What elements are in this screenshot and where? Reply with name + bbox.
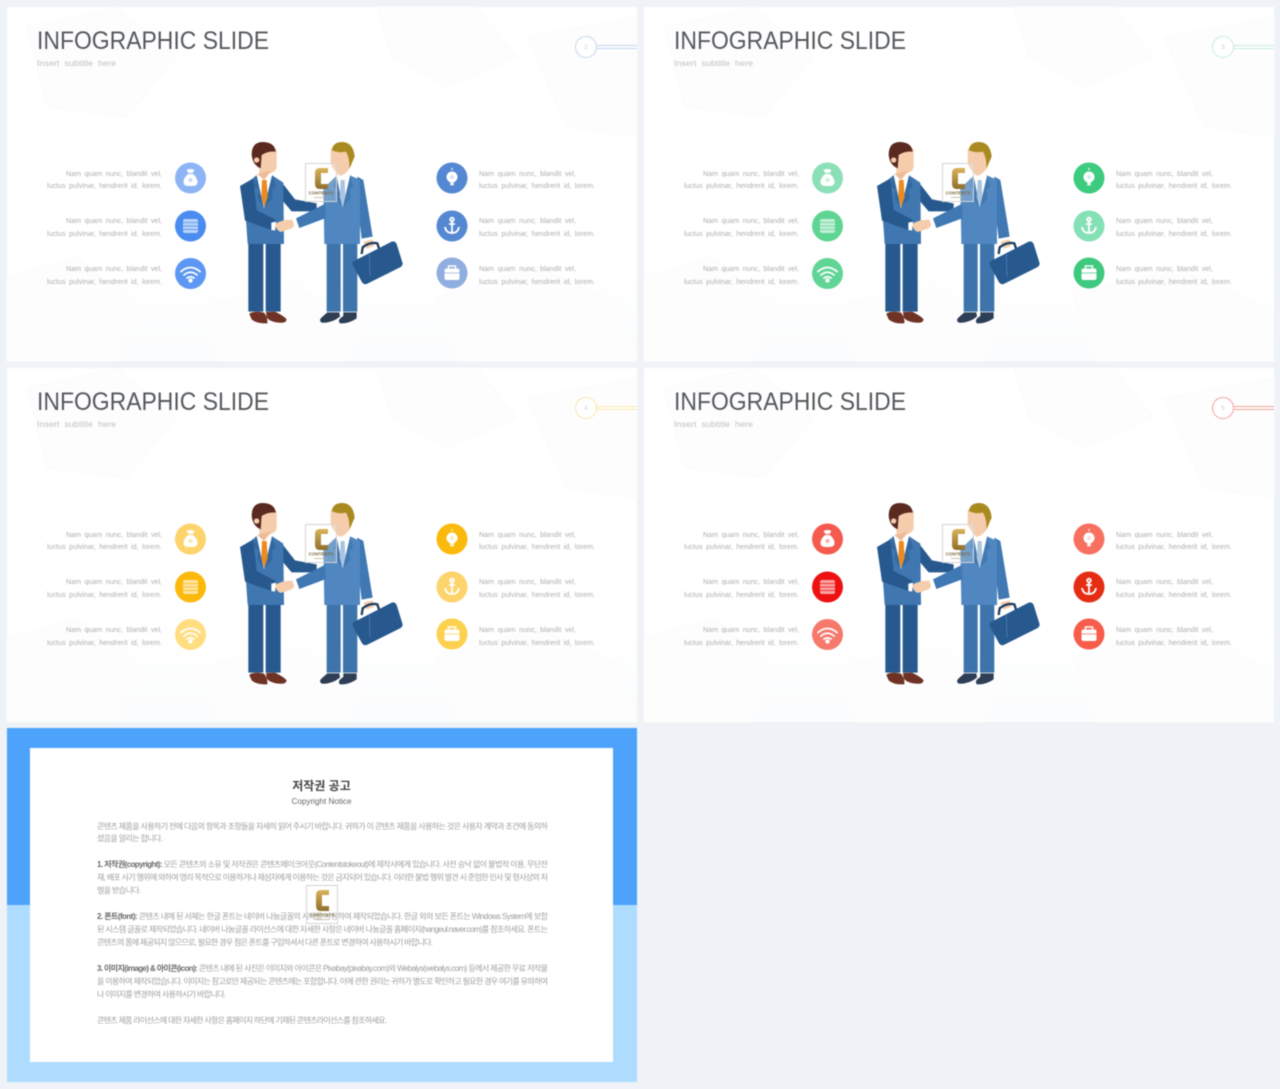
left text 1: Nam quam nunc, blandit vel, xyxy=(66,530,162,539)
icon: wifi xyxy=(175,258,206,289)
left text 3: Nam quam nunc, blandit vel, xyxy=(66,264,162,273)
right text 3: Nam quam nunc, blandit vel, xyxy=(1116,264,1213,273)
left text 3: luctus pulvinar, hendrerit id, lorem. xyxy=(684,277,799,286)
notice intro: 셨음을 알리는 합니다. xyxy=(97,833,163,843)
right text 2 xyxy=(479,577,595,599)
right text 1: Nam quam nunc, blandit vel, xyxy=(479,169,576,178)
right text 2 xyxy=(1116,216,1232,238)
icon: anchor xyxy=(436,210,468,242)
right text 3: luctus pulvinar, hendrerit id, lorem. xyxy=(1116,277,1232,286)
page number badge xyxy=(1212,36,1274,58)
left text 1: Nam quam nunc, blandit vel, xyxy=(66,169,162,178)
right text 2: Nam quam nunc, blandit vel, xyxy=(1116,216,1213,225)
right text 3 xyxy=(1116,625,1232,647)
left text 1: luctus pulvinar, hendrerit id, lorem. xyxy=(684,181,799,190)
icon: light bulb xyxy=(436,524,468,554)
subtitle: Insert subtitle here xyxy=(37,58,116,68)
left text 1: Nam quam nunc, blandit vel, xyxy=(703,169,799,178)
left text 1: luctus pulvinar, hendrerit id, lorem. xyxy=(684,542,799,551)
left text 1 xyxy=(684,530,799,551)
subtitle: Insert subtitle here xyxy=(674,419,753,429)
right text 1 xyxy=(479,530,595,551)
left text 2 xyxy=(47,216,162,238)
icon: money bag xyxy=(175,524,206,554)
panel: slide 3 green xyxy=(644,7,1274,361)
right text 3 xyxy=(479,264,595,286)
right text 1: Nam quam nunc, blandit vel, xyxy=(1116,169,1213,178)
notice subheading: Copyright Notice xyxy=(292,796,352,806)
notice heading: 저작권 공고 xyxy=(292,778,351,793)
closing note: 콘텐츠 제품 라이선스에 대한 자세한 사항은 홈페이지 하단에 기재된 콘텐츠라이선스를 참조하세요. xyxy=(97,1015,387,1025)
panel: copyright notice xyxy=(7,728,637,1082)
watermark xyxy=(306,524,336,562)
section 1: copyright xyxy=(97,859,548,895)
right text 2: Nam quam nunc, blandit vel, xyxy=(479,216,576,225)
page number badge xyxy=(576,398,637,418)
watermark xyxy=(942,164,974,202)
watermark xyxy=(306,164,336,202)
left text 1: luctus pulvinar, hendrerit id, lorem. xyxy=(47,542,162,551)
icon: coin stack xyxy=(175,210,206,242)
section 3: image and icon: 나 이미지를 변경하여 사용하시기 바랍니다. xyxy=(97,989,226,999)
icon: coin stack xyxy=(812,210,843,242)
icon: wifi xyxy=(812,619,843,650)
left text 1: Nam quam nunc, blandit vel, xyxy=(703,530,799,539)
section 2: font xyxy=(97,911,549,947)
icon: coin stack xyxy=(812,572,843,602)
illustration: handshake xyxy=(877,142,1040,323)
title: INFOGRAPHIC SLIDE xyxy=(674,27,906,55)
left text 2: Nam quam nunc, blandit vel, xyxy=(66,577,162,586)
subtitle: Insert subtitle here xyxy=(37,419,116,429)
section 1: copyright: 벌을 받습니다. xyxy=(97,885,141,895)
page number badge xyxy=(1212,398,1274,418)
section 3: image and icon xyxy=(97,963,548,999)
left text 2: luctus pulvinar, hendrerit id, lorem. xyxy=(684,229,799,238)
left text 3 xyxy=(47,625,162,647)
right text 2: Nam quam nunc, blandit vel, xyxy=(1116,577,1213,586)
icon: briefcase xyxy=(436,258,468,288)
left text 3: luctus pulvinar, hendrerit id, lorem. xyxy=(684,638,799,647)
left text 2: Nam quam nunc, blandit vel, xyxy=(66,216,162,225)
right text 3: Nam quam nunc, blandit vel, xyxy=(1116,625,1213,634)
right text 2: luctus pulvinar, hendrerit id, lorem. xyxy=(479,229,595,238)
icon: wifi xyxy=(175,619,206,650)
left text 1 xyxy=(47,169,162,190)
right text 3: luctus pulvinar, hendrerit id, lorem. xyxy=(479,638,595,647)
right text 1: Nam quam nunc, blandit vel, xyxy=(1116,530,1213,539)
left text 2 xyxy=(684,216,799,238)
icon: anchor xyxy=(436,572,468,602)
title: INFOGRAPHIC SLIDE xyxy=(37,27,269,55)
icon: light bulb xyxy=(436,162,468,194)
left text 2: luctus pulvinar, hendrerit id, lorem. xyxy=(47,229,162,238)
title: INFOGRAPHIC SLIDE xyxy=(674,388,906,416)
left text 3 xyxy=(47,264,162,286)
section 2: font: 콘텐츠의 폼에 제공되지 않으므로, 필요한 경우 점은 폰트를 구입하셔서 다른 폰트로 변경하여 사용하시기 바랍니다. xyxy=(97,937,433,947)
subtitle: Insert subtitle here xyxy=(674,58,753,68)
left text 2: Nam quam nunc, blandit vel, xyxy=(703,577,799,586)
left text 3: luctus pulvinar, hendrerit id, lorem. xyxy=(47,277,162,286)
right text 3 xyxy=(1116,264,1232,286)
left text 3: Nam quam nunc, blandit vel, xyxy=(703,625,799,634)
icon: coin stack xyxy=(175,572,206,602)
right text 3: luctus pulvinar, hendrerit id, lorem. xyxy=(479,277,595,286)
left text 1: luctus pulvinar, hendrerit id, lorem. xyxy=(47,181,162,190)
icon: light bulb xyxy=(1074,524,1104,554)
left text 2 xyxy=(684,577,799,599)
page number badge xyxy=(576,36,637,58)
icon: money bag xyxy=(812,162,843,194)
left text 3: Nam quam nunc, blandit vel, xyxy=(703,264,799,273)
right text 1 xyxy=(479,169,595,190)
panel: slide 2 blue xyxy=(7,7,637,361)
icon: wifi xyxy=(812,258,843,289)
page number badge: 2 xyxy=(584,45,588,51)
left text 2 xyxy=(47,577,162,599)
icon: briefcase xyxy=(1074,618,1104,650)
right text 2 xyxy=(1116,577,1232,599)
left text 3: Nam quam nunc, blandit vel, xyxy=(66,625,162,634)
panel: slide 5 red xyxy=(644,368,1274,722)
watermark xyxy=(306,886,338,924)
right text 1 xyxy=(1116,530,1232,551)
section 3: image and icon: 3. 이미지(image) & 아이콘(icon): 콘텐츠 내에 된 사진은 이미지와 아이콘은 Pixabay(pixabay.com)와 Webalys(webalys.com) 등에서 제공한 무료 저작물 xyxy=(97,963,548,973)
right text 2: luctus pulvinar, hendrerit id, lorem. xyxy=(479,590,595,599)
right text 1: luctus pulvinar, hendrerit id, lorem. xyxy=(479,542,595,551)
page number badge: 3 xyxy=(1221,45,1225,51)
right text 3: Nam quam nunc, blandit vel, xyxy=(479,264,576,273)
right text 3: luctus pulvinar, hendrerit id, lorem. xyxy=(1116,638,1232,647)
left text 1 xyxy=(47,530,162,551)
notice intro: 콘텐츠 제품을 사용하기 전에 다음의 항목과 조항들을 자세히 읽어 주시기 바랍니다. 귀하가 이 콘텐츠 제품을 사용하는 것은 사용자 계약과 조건에 동의하 xyxy=(97,821,549,831)
section 3: image and icon: 을 이용하여 제작되었습니다. 이미지는 참고로만 제공되는 콘텐츠에는 포함합니다. 이에 관한 권리는 귀하가 별도로 확인하고 필요한 경우 여기를 유의하여 xyxy=(97,976,548,986)
page number badge: 5 xyxy=(1221,406,1225,412)
icon: light bulb xyxy=(1074,162,1104,194)
left text 2: luctus pulvinar, hendrerit id, lorem. xyxy=(47,590,162,599)
right text 2: luctus pulvinar, hendrerit id, lorem. xyxy=(1116,590,1232,599)
icon: briefcase xyxy=(1074,258,1104,288)
right text 1: luctus pulvinar, hendrerit id, lorem. xyxy=(479,181,595,190)
section 2: font: 2. 폰트(font): 콘텐츠 내에 된 서체는 한글 폰트는 네이버 나눔글꼴의 서체를 사용하여 제작되었습니다. 한글 외의 보든 폰트는 Windows System에 보함 xyxy=(97,911,549,921)
left text 3 xyxy=(684,264,799,286)
title: INFOGRAPHIC SLIDE xyxy=(37,388,269,416)
icon: briefcase xyxy=(436,618,468,650)
left text 2: Nam quam nunc, blandit vel, xyxy=(703,216,799,225)
icon: anchor xyxy=(1074,572,1104,602)
right text 1: Nam quam nunc, blandit vel, xyxy=(479,530,576,539)
left text 1 xyxy=(684,169,799,190)
right text 2: luctus pulvinar, hendrerit id, lorem. xyxy=(1116,229,1232,238)
icon: money bag xyxy=(175,162,206,194)
illustration: handshake xyxy=(240,503,403,684)
panel: slide 4 yellow xyxy=(7,368,637,722)
right text 1 xyxy=(1116,169,1232,190)
right text 3: Nam quam nunc, blandit vel, xyxy=(479,625,576,634)
watermark xyxy=(942,524,974,562)
illustration: handshake xyxy=(877,503,1040,684)
right text 1: luctus pulvinar, hendrerit id, lorem. xyxy=(1116,181,1232,190)
section 1: copyright: 1. 저작권(copyright): 모든 콘텐츠의 소유 및 저작권은 콘텐츠메이크아웃(Contentstokeout)에 제작사에게 있습니다. 사전 승낙 없이 불법적 이용, 무단전 xyxy=(97,859,548,869)
section 2: font: 된 시스템 글꼴로 제작되었습니다. 네이버 나눔글꼴 라이선스에 대한 자세한 사항은 네이버 나눔글꼴 홈페이지(hangeul.naver.com)를 참조하세요. 폰트는 xyxy=(97,924,548,934)
right text 2 xyxy=(479,216,595,238)
right text 2: Nam quam nunc, blandit vel, xyxy=(479,577,576,586)
left text 3 xyxy=(684,625,799,647)
right text 1: luctus pulvinar, hendrerit id, lorem. xyxy=(1116,542,1232,551)
left text 2: luctus pulvinar, hendrerit id, lorem. xyxy=(684,590,799,599)
right text 3 xyxy=(479,625,595,647)
icon: anchor xyxy=(1074,210,1104,242)
left text 3: luctus pulvinar, hendrerit id, lorem. xyxy=(47,638,162,647)
icon: money bag xyxy=(812,524,843,554)
page number badge: 4 xyxy=(584,406,588,412)
notice intro xyxy=(97,821,549,843)
section 1: copyright: 재, 배포 사기 행위에 의하여 영리 목적으로 이용하거나 제삼자에게 이용하는 것은 금지되어 있습니다. 이러한 불법 행위 발견 시 준엄한 민사 및 형사상의 처 xyxy=(97,872,548,882)
illustration: handshake xyxy=(240,142,403,323)
